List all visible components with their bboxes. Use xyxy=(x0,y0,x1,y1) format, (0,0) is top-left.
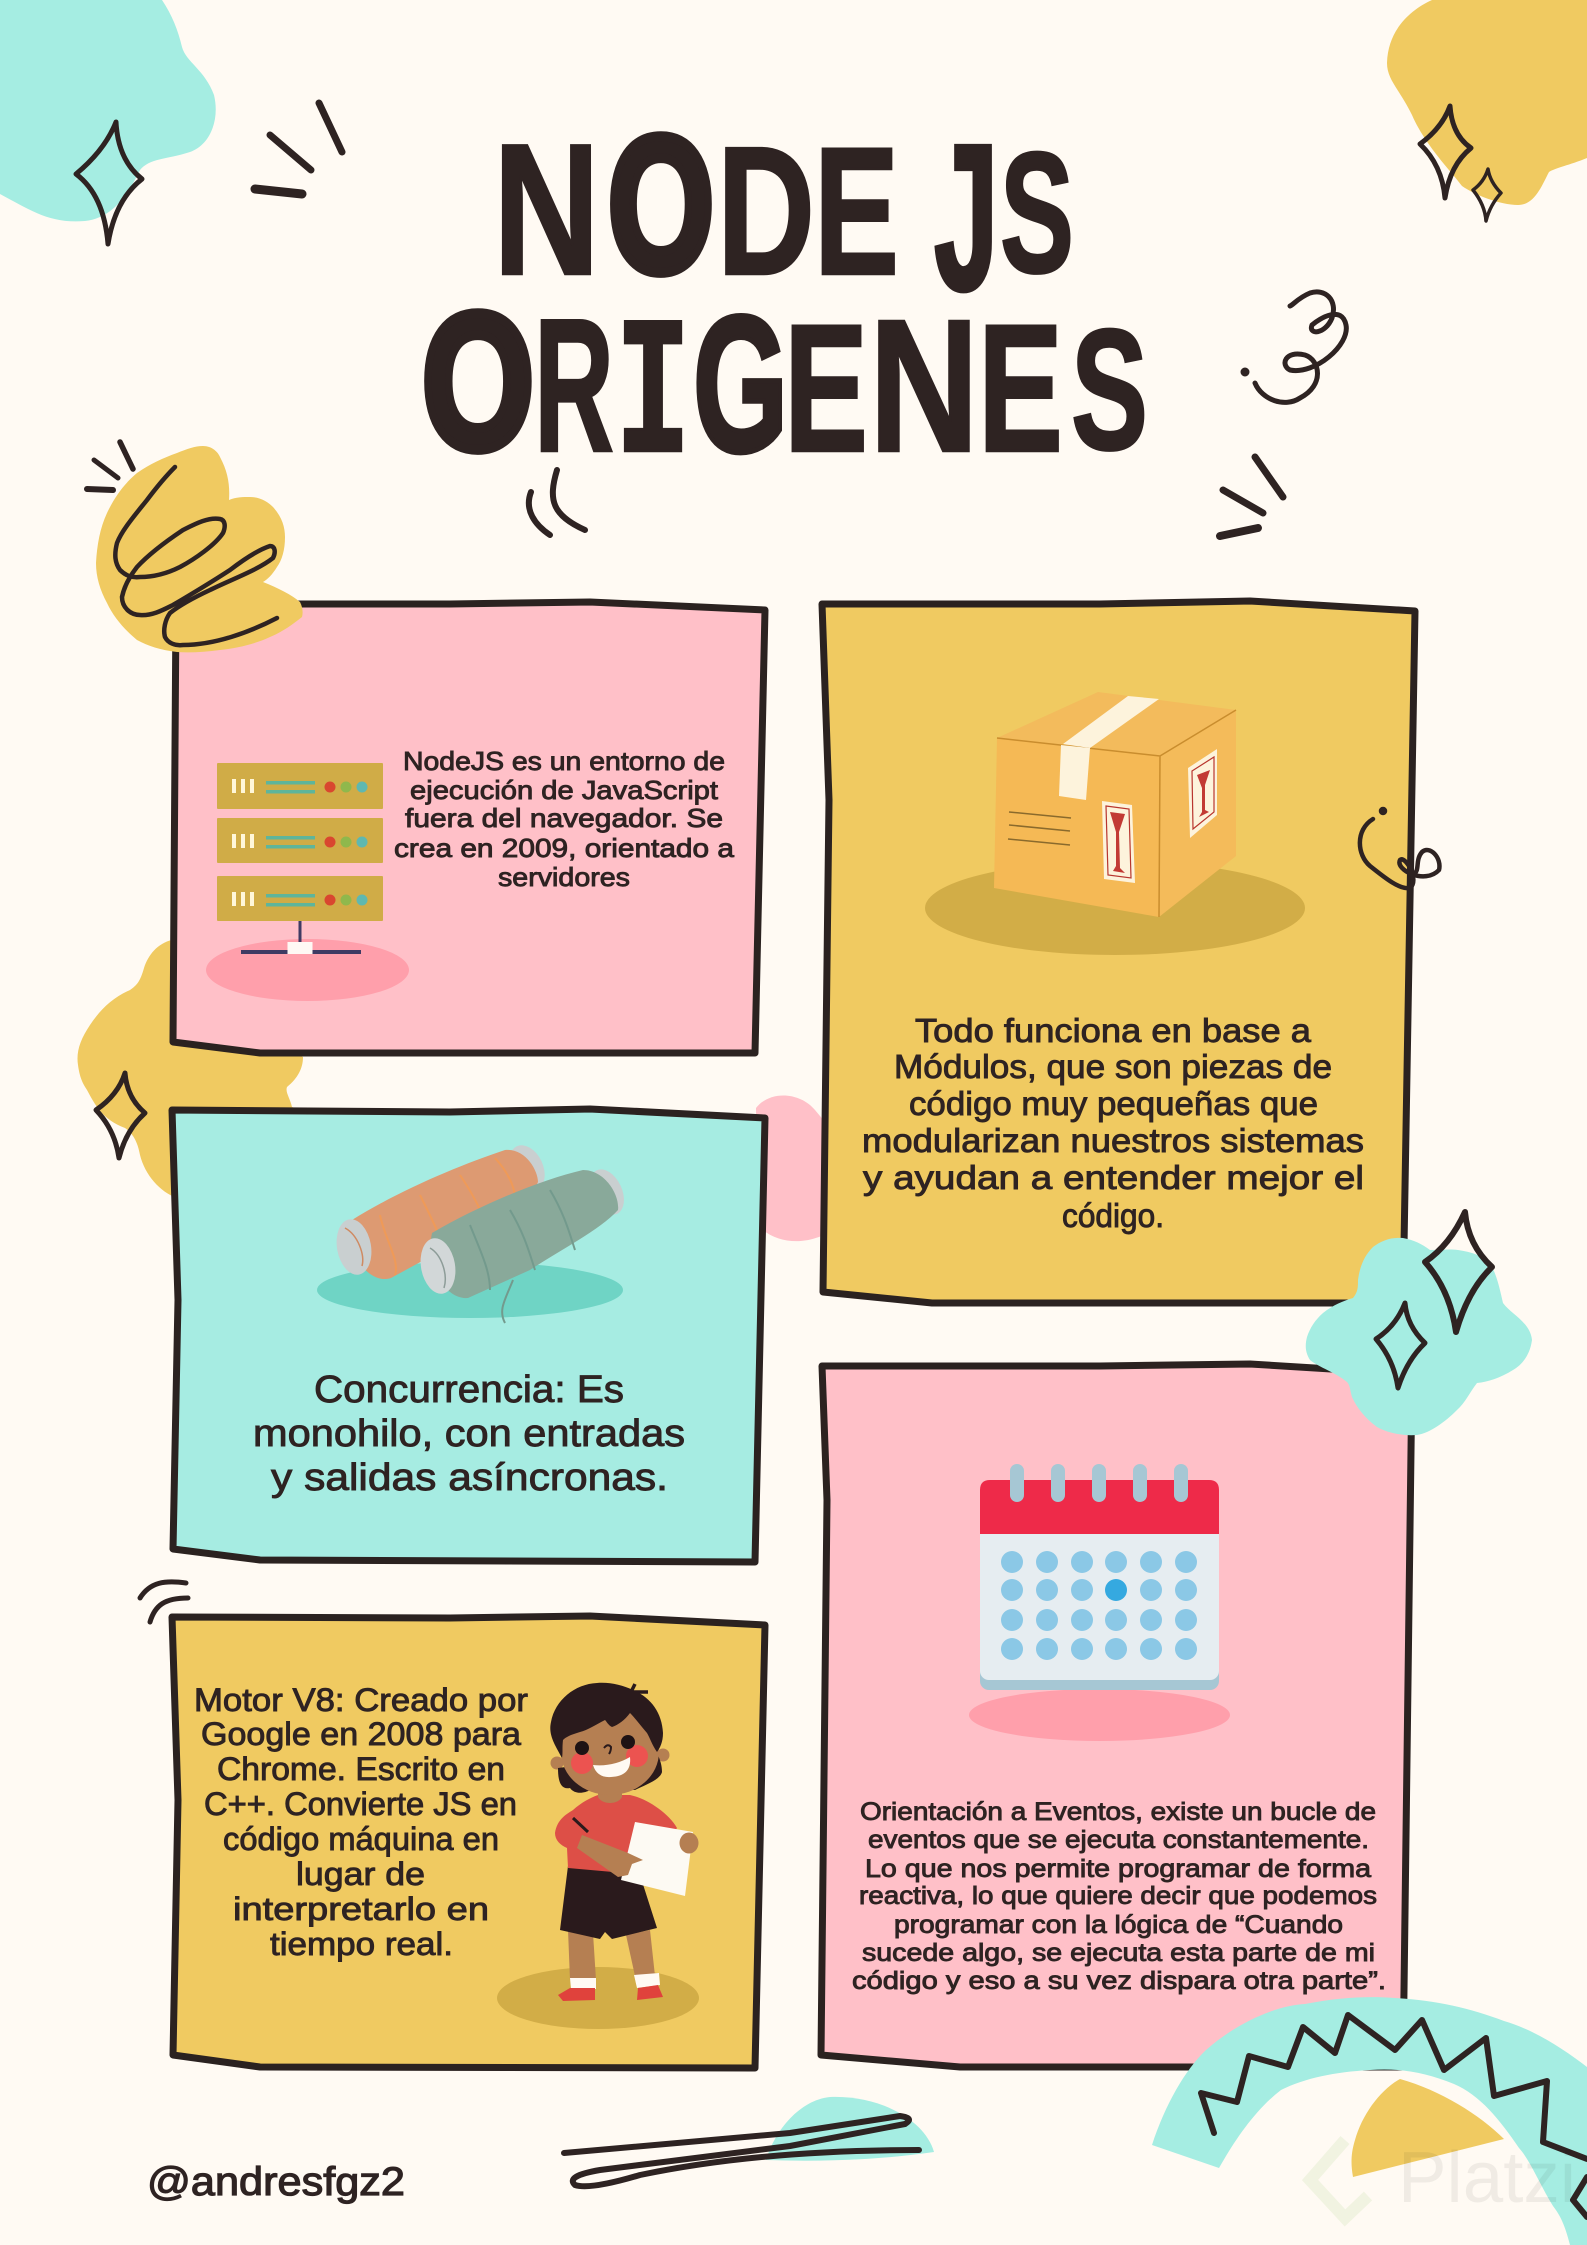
icon: server rack xyxy=(206,763,409,1001)
title: N xyxy=(869,281,979,492)
text: V8 description: Chrome. Escrito en xyxy=(217,1751,505,1787)
text: author handle: @andresfgz2 xyxy=(147,2160,405,2204)
text: NodeJS description: servidores xyxy=(498,862,630,892)
icon: thread spools xyxy=(317,1139,631,1323)
watermark: Platzi xyxy=(1310,2138,1576,2218)
icon: curves above V8 panel xyxy=(140,1582,188,1622)
icon: sparkle top-left xyxy=(76,122,142,244)
text: concurrency description xyxy=(253,1369,685,1499)
text: concurrency description: y salidas asíncronas. xyxy=(271,1457,668,1499)
shape: teal arc xyxy=(1152,1997,1587,2245)
watermark: Platzi: Platzi xyxy=(1398,2138,1576,2218)
text: concurrency description: monohilo, con entradas xyxy=(253,1413,685,1455)
icon: cardboard box xyxy=(925,692,1305,955)
text: V8 description: interpretarlo en xyxy=(233,1891,489,1927)
text: events description: Lo que nos permite programar de forma xyxy=(865,1855,1371,1883)
text: events description xyxy=(852,1798,1386,1995)
icon: squiggle on modules panel xyxy=(1360,809,1439,888)
text: V8 description: código máquina en xyxy=(223,1821,499,1857)
icon: child with paper xyxy=(497,1683,699,2029)
text: events description: código y eso a su vez dispara otra parte”. xyxy=(852,1967,1386,1995)
title: O xyxy=(422,273,534,489)
text: V8 description: tiempo real. xyxy=(270,1926,453,1962)
panel: event orientation xyxy=(821,1364,1412,2067)
text: V8 description: C++. Convierte JS en xyxy=(204,1786,517,1822)
text: modules description: Módulos, que son piezas de xyxy=(894,1048,1332,1085)
panel: V8 engine xyxy=(172,1616,765,2068)
panel: modules xyxy=(822,601,1415,1303)
title: I xyxy=(615,288,691,511)
title: J xyxy=(929,108,1004,357)
shape: yellow wedge xyxy=(1352,2079,1504,2177)
blob: yellow behind left panels xyxy=(78,940,303,1198)
text: events description: programar con la lógica de “Cuando xyxy=(894,1911,1343,1939)
text: modules description xyxy=(862,1012,1364,1234)
blob: pink behind middle xyxy=(756,1095,840,1241)
title: R xyxy=(534,280,614,492)
text: NodeJS description: crea en 2009, orientado a xyxy=(394,833,735,863)
icon: sparkle small xyxy=(1473,169,1501,221)
text: NodeJS description: NodeJS es un entorno de xyxy=(403,746,725,776)
panel: server intro xyxy=(173,602,765,1053)
text: modules description: Todo funciona en base a xyxy=(915,1012,1312,1049)
title: S xyxy=(1071,294,1148,486)
text: concurrency description: Concurrencia: Es xyxy=(314,1369,624,1411)
title: E xyxy=(978,286,1063,490)
icon: sparkle large xyxy=(1420,106,1471,198)
icon: curves below title xyxy=(529,470,585,535)
text: V8 description: Google en 2008 para xyxy=(201,1716,521,1752)
blob: teal bottom center with pen scribble xyxy=(564,2097,934,2186)
icon: sparkle small xyxy=(1376,1303,1425,1388)
text: events description: eventos que se ejecuta constantemente. xyxy=(868,1826,1369,1854)
title xyxy=(422,96,1148,511)
title: E xyxy=(814,109,899,313)
text: modules description: modularizan nuestros sistemas xyxy=(862,1122,1364,1159)
title: S xyxy=(1000,117,1074,309)
decoration: bottom right arc xyxy=(1152,1997,1587,2245)
text: events description: Orientación a Eventos, existe un bucle de xyxy=(860,1798,1376,1826)
icon: calendar xyxy=(969,1464,1230,1741)
icon: ticks near yellow blob xyxy=(87,442,133,490)
icon: sparkle on left blob xyxy=(96,1073,145,1158)
title: E xyxy=(784,286,868,490)
title: G xyxy=(693,276,788,493)
text: V8 description: lugar de xyxy=(296,1856,425,1892)
title: O xyxy=(608,96,714,312)
text: V8 description xyxy=(194,1682,528,1962)
blob: yellow with scribble xyxy=(96,446,303,652)
text: NodeJS description: ejecución de JavaScript xyxy=(410,775,719,805)
text: V8 description: Motor V8: Creado por xyxy=(194,1682,528,1718)
title: N xyxy=(493,105,600,314)
icon: ticks left of title xyxy=(255,103,342,194)
icon: spiral right of title xyxy=(1243,292,1346,402)
icon: scribble xyxy=(115,467,277,645)
icon: ticks right below title xyxy=(1220,457,1283,536)
icon: zigzag line xyxy=(1201,2015,1587,2217)
text: NodeJS description xyxy=(394,746,735,892)
text: events description: sucede algo, se ejecuta esta parte de mi xyxy=(862,1939,1375,1967)
text: modules description: y ayudan a entender mejor el xyxy=(863,1159,1364,1196)
text: modules description: código. xyxy=(1062,1197,1164,1234)
panel: concurrency xyxy=(172,1109,765,1562)
title: D xyxy=(717,108,815,313)
text: modules description: código muy pequeñas que xyxy=(909,1085,1318,1122)
text: NodeJS description: fuera del navegador. Se xyxy=(405,803,723,833)
blob: yellow top-right with sparkles xyxy=(1387,0,1587,221)
blob: teal top-left with sparkle xyxy=(0,0,216,244)
icon: sparkle large xyxy=(1425,1212,1492,1332)
icon: pen scribble xyxy=(564,2116,919,2186)
blob: teal right with sparkles xyxy=(1306,1212,1532,1435)
text: events description: reactiva, lo que quiere decir que podemos xyxy=(859,1882,1377,1910)
